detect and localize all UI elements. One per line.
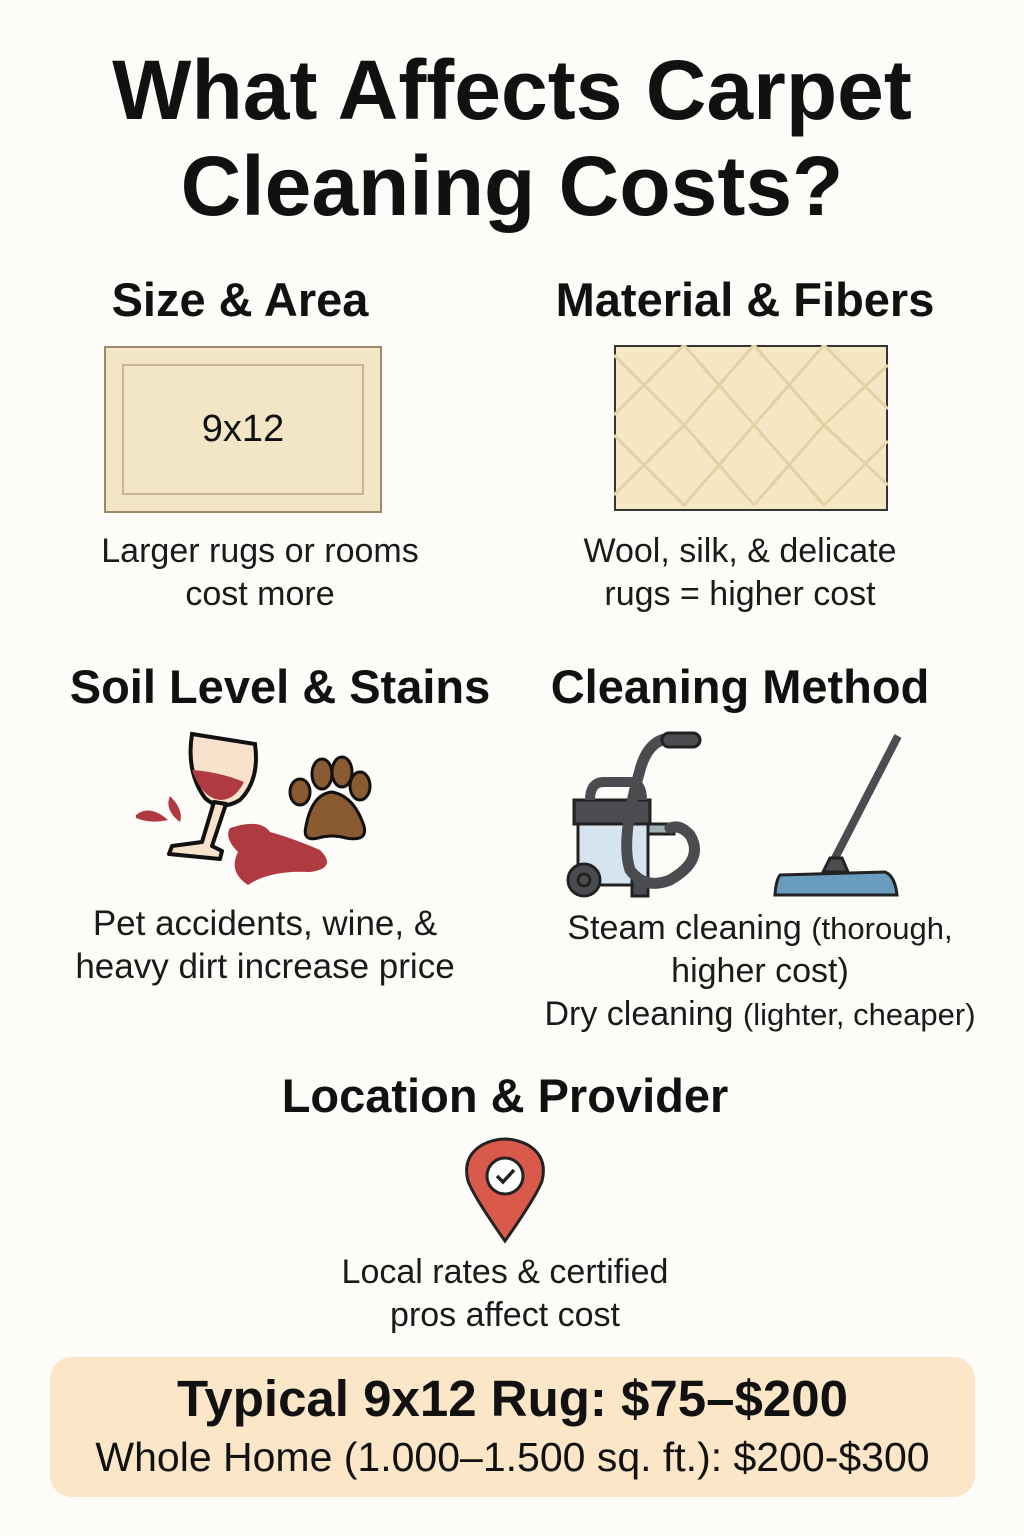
icon: rug 9x12: 9x12 <box>202 408 284 450</box>
price subline: Whole Home (1.000–1.500 sq. ft.): $200-$300 <box>95 1434 930 1480</box>
title <box>112 43 912 233</box>
icon: vacuums <box>566 732 902 898</box>
text: method <box>544 909 976 1033</box>
text: soil: Pet accidents, wine, & <box>93 904 437 943</box>
title: What Affects Carpet <box>112 43 912 137</box>
text: location: pros affect cost <box>390 1296 620 1334</box>
text: location: Local rates & certified <box>342 1253 668 1291</box>
title: Cleaning Costs? <box>181 139 843 233</box>
heading: soil: Soil Level & Stains <box>70 660 490 713</box>
text: location <box>342 1253 668 1334</box>
heading: size & area: Size & Area <box>112 273 368 326</box>
text: material: Wool, silk, & delicate <box>583 532 897 570</box>
text: method: Steam cleaning (thorough, <box>567 909 953 947</box>
text: size: Larger rugs or rooms <box>101 532 419 570</box>
icon: wine and paw <box>136 732 372 885</box>
icon: patterned rug <box>614 345 888 511</box>
price headline: Typical 9x12 Rug: $75–$200 <box>177 1370 848 1427</box>
text: soil <box>75 904 455 986</box>
text: soil: heavy dirt increase price <box>75 947 455 986</box>
icon: location pin <box>465 1138 545 1244</box>
text: size: cost more <box>185 575 335 613</box>
heading: location: Location & Provider <box>282 1069 728 1122</box>
text: size <box>101 532 419 613</box>
text: method: higher cost) <box>671 952 849 990</box>
text: method: Dry cleaning (lighter, cheaper) <box>544 995 976 1033</box>
text: material: rugs = higher cost <box>604 575 876 613</box>
price box <box>50 1357 975 1497</box>
icon: rug 9x12 <box>104 346 382 513</box>
heading: material: Material & Fibers <box>556 273 934 326</box>
text: material <box>583 532 897 613</box>
heading: method: Cleaning Method <box>551 660 929 713</box>
